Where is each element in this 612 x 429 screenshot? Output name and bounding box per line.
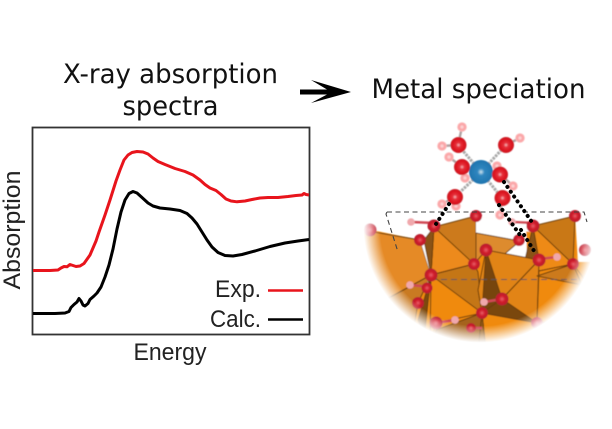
heading: X-ray absorption spectra: X-ray absorption (63, 59, 278, 90)
oxygen atoms (447, 137, 514, 206)
arrow (300, 80, 351, 103)
metal-oxygen bonds (455, 145, 506, 198)
hydrated metal complex (437, 122, 525, 220)
x-axis label: Energy (134, 339, 206, 366)
left octahedra (370, 232, 430, 294)
backing shade (376, 222, 590, 332)
plot frame (32, 128, 310, 334)
lower-centre octahedra (429, 270, 477, 330)
chart: absorption spectra (0, 128, 310, 366)
heading: X-ray absorption spectra: spectra (122, 91, 218, 122)
surface O-H bonds (410, 222, 557, 328)
hydrogen atoms (437, 122, 525, 220)
legend: Calc.: Calc. (210, 306, 261, 333)
dashed unit cell outline (386, 212, 587, 252)
legend: Exp. (215, 276, 303, 303)
dashed cell bottom line (431, 278, 580, 280)
dotted bonds to surface (436, 182, 536, 254)
metal atom (469, 160, 493, 184)
infographic canvas (2, 62, 592, 365)
heading: Metal speciation: Metal speciation (372, 74, 586, 105)
heading: X-ray absorption spectra (63, 59, 278, 122)
curve: experimental spectrum (33, 152, 309, 270)
legend: Calc. (210, 306, 303, 333)
legend: Exp.: Exp. (215, 276, 261, 303)
curve: calculated spectrum (33, 192, 309, 314)
oxygen-hydrogen bonds (442, 127, 520, 215)
surface hydrogen atoms (406, 218, 561, 324)
centre-top octahedra (438, 216, 476, 260)
surface oxygen atoms (364, 210, 591, 333)
mineral surface slab (360, 210, 600, 350)
